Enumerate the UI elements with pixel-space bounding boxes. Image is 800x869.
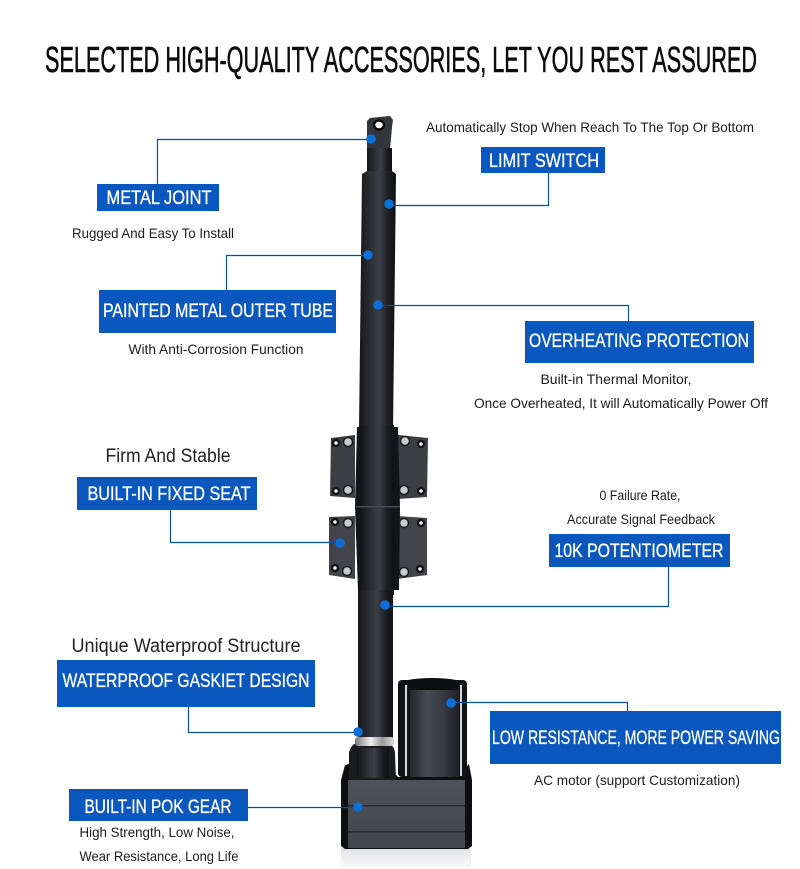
label: waterproof gasket design: Unique Waterproof Structure [72, 636, 300, 657]
label: 10k potentiometer: Accurate Signal Feedback [567, 511, 716, 527]
label: metal joint: Rugged And Easy To Install [72, 225, 234, 241]
label: overheating protection: Once Overheated, It will Automatically Power Off [474, 395, 768, 411]
label: waterproof gasket design [57, 636, 315, 707]
label: low resistance: AC motor (support Customization) [534, 772, 740, 788]
label: metal joint [72, 184, 234, 241]
label: built-in fixed seat [77, 446, 257, 510]
lower tube [358, 590, 393, 740]
label: built-in pok gear: Wear Resistance, Long Life [80, 848, 239, 864]
callout dots [335, 134, 456, 812]
callout lines [158, 140, 668, 808]
label: metal joint: METAL JOINT [106, 188, 212, 209]
gear box shell [341, 763, 472, 849]
label: built-in fixed seat: Firm And Stable [106, 446, 230, 467]
label: limit switch [426, 119, 754, 173]
base reflection [341, 848, 471, 868]
product image: linear actuator [329, 116, 472, 868]
upper tube [359, 171, 396, 430]
label: 10k potentiometer [549, 487, 730, 567]
right mounting brackets [398, 435, 428, 499]
neck [367, 148, 392, 173]
clamp body [355, 427, 400, 590]
motor [398, 680, 467, 777]
label: built-in fixed seat: BUILT-IN FIXED SEAT [88, 484, 251, 505]
silver collar [355, 737, 394, 746]
label: overheating protection: OVERHEATING PROTECTION [529, 331, 749, 352]
label: painted metal outer tube: With Anti-Corrosion Function [128, 341, 304, 357]
label: limit switch: LIMIT SWITCH [489, 151, 599, 172]
label: overheating protection [474, 321, 768, 411]
gear box front panel [348, 780, 465, 848]
label: built-in pok gear: BUILT-IN POK GEAR [84, 797, 232, 818]
bolts [332, 440, 424, 572]
label: built-in pok gear: High Strength, Low Noise, [80, 824, 234, 840]
eye joint [367, 116, 393, 150]
label: 10k potentiometer: 0 Failure Rate, [600, 487, 680, 503]
label: overheating protection: Built-in Thermal Monitor, [540, 371, 692, 387]
left mounting brackets [330, 435, 355, 498]
gasket sleeve [349, 743, 396, 780]
label: limit switch: Automatically Stop When Reach To The Top Or Bottom [426, 119, 754, 135]
label: painted metal outer tube: PAINTED METAL OUTER TUBE [103, 301, 333, 322]
label: waterproof gasket design: WATERPROOF GASKIET DESIGN [62, 671, 310, 692]
label: built-in pok gear [69, 789, 248, 864]
label: 10k potentiometer: 10K POTENTIOMETER [554, 541, 724, 562]
label: low resistance [490, 711, 781, 788]
label: painted metal outer tube [99, 290, 336, 357]
